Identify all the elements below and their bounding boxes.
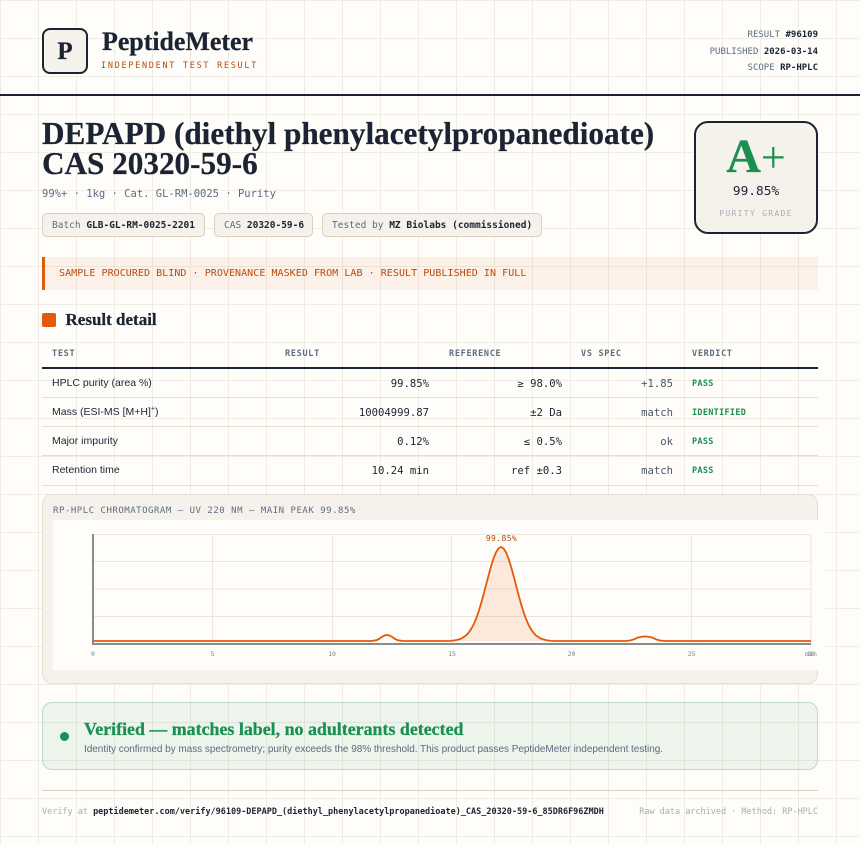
results table: RESULT bbox=[285, 349, 320, 359]
verified panel bbox=[42, 702, 818, 770]
grade caption: PURITY GRADE bbox=[719, 209, 793, 218]
row: mass: Mass (ESI-MS [M+H]+) bbox=[52, 405, 158, 418]
product title bbox=[42, 116, 654, 181]
row: major impurity: PASS bbox=[692, 437, 714, 447]
results table: TEST bbox=[52, 349, 75, 359]
status dot bbox=[60, 732, 69, 741]
logo mark: P bbox=[57, 38, 73, 65]
row: mass: ±2 Da bbox=[530, 407, 562, 419]
grade letter: A+ bbox=[726, 130, 786, 183]
axes bbox=[93, 534, 811, 644]
row: hplc purity: ≥ 98.0% bbox=[517, 378, 562, 390]
section marker bbox=[42, 313, 56, 327]
provenance banner bbox=[42, 257, 818, 290]
verify link: Verify at peptidemeter.com/verify/96109-DEPAPD_(diethyl_phenylacetylpropanedioate)_CAS_20320-59-6_85DR6F96ZMDH bbox=[42, 807, 604, 817]
row: major impurity: 0.12% bbox=[397, 436, 429, 448]
row: major impurity: Major impurity bbox=[52, 434, 118, 446]
grade score: 99.85% bbox=[733, 184, 779, 199]
chip: tested by: Tested by MZ Biolabs (commissioned) bbox=[332, 220, 532, 231]
brand tagline: INDEPENDENT TEST RESULT bbox=[101, 61, 258, 71]
grade card bbox=[694, 121, 818, 234]
x axis labels: 30 bbox=[807, 650, 815, 658]
chip: tested by bbox=[322, 213, 542, 237]
chip: batch: Batch GLB-GL-RM-0025-2201 bbox=[52, 220, 195, 231]
product subtitle: 99%+ · 1kg · Cat. GL-RM-0025 · Purity bbox=[42, 188, 276, 200]
row: mass: 10004999.87 bbox=[359, 407, 429, 419]
result metadata bbox=[710, 30, 818, 73]
row: mass bbox=[52, 405, 746, 419]
row: major impurity: ≤ 0.5% bbox=[524, 436, 562, 448]
row: major impurity: ok bbox=[660, 436, 673, 448]
chip: batch bbox=[42, 213, 205, 237]
row: retention time: match bbox=[641, 465, 673, 477]
row: major impurity bbox=[52, 434, 714, 448]
row: retention time bbox=[52, 464, 714, 477]
product title: DEPAPD (diethyl phenylacetylpropanedioate) bbox=[42, 116, 654, 151]
chromatogram trace bbox=[93, 547, 811, 641]
x axis labels: 20 bbox=[568, 650, 575, 658]
header bbox=[0, 0, 860, 96]
row: hplc purity bbox=[52, 376, 714, 390]
chip: cas: CAS 20320-59-6 bbox=[224, 220, 304, 231]
archive note: Raw data archived · Method: RP-HPLC bbox=[639, 807, 818, 817]
chip: cas bbox=[214, 213, 313, 237]
x axis labels bbox=[91, 650, 817, 658]
logo mark bbox=[42, 28, 88, 74]
row: retention time: Retention time bbox=[52, 464, 120, 476]
results table: REFERENCE bbox=[449, 349, 501, 359]
row: mass: match bbox=[641, 407, 673, 419]
chromatogram title: RP-HPLC CHROMATOGRAM — UV 220 NM — MAIN PEAK 99.85% bbox=[53, 506, 356, 516]
row: hplc purity: HPLC purity (area %) bbox=[52, 376, 152, 388]
x axis labels: min bbox=[805, 650, 817, 658]
row: hplc purity: 99.85% bbox=[391, 378, 429, 390]
peak area bbox=[446, 547, 556, 641]
row: retention time: PASS bbox=[692, 466, 714, 476]
provenance banner: SAMPLE PROCURED BLIND · PROVENANCE MASKED FROM LAB · RESULT PUBLISHED IN FULL bbox=[59, 268, 526, 279]
chromatogram panel bbox=[42, 494, 818, 684]
row: retention time: 10.24 min bbox=[372, 465, 429, 477]
results table: VERDICT bbox=[692, 349, 733, 359]
result metadata: PUBLISHED 2026-03-14 bbox=[710, 47, 818, 57]
verified description: Identity confirmed by mass spectrometry; purity exceeds the 98% threshold. This product passes PeptideMeter independent testing. bbox=[84, 744, 663, 754]
row: hplc purity: PASS bbox=[692, 379, 714, 389]
x axis labels: 15 bbox=[448, 650, 456, 658]
chromatogram chart bbox=[53, 520, 825, 670]
brand name: PeptideMeter bbox=[102, 27, 253, 56]
result metadata: SCOPE RP-HPLC bbox=[748, 63, 818, 73]
x axis labels: 10 bbox=[328, 650, 336, 658]
product title: CAS 20320-59-6 bbox=[42, 146, 258, 181]
results table bbox=[42, 349, 818, 486]
verified heading: Verified — matches label, no adulterants detected bbox=[84, 719, 463, 739]
x axis labels: 0 bbox=[91, 650, 95, 658]
section heading: Result detail bbox=[66, 310, 157, 329]
x axis labels: 25 bbox=[688, 650, 695, 658]
footer bbox=[42, 790, 818, 820]
row: hplc purity: +1.85 bbox=[641, 378, 673, 390]
x axis labels: 5 bbox=[211, 650, 215, 658]
row: mass: IDENTIFIED bbox=[692, 408, 746, 418]
results table: VS SPEC bbox=[581, 349, 622, 359]
peak label: 99.85% bbox=[486, 534, 517, 543]
row: retention time: ref ±0.3 bbox=[511, 465, 562, 477]
result metadata: RESULT #96109 bbox=[748, 30, 818, 40]
